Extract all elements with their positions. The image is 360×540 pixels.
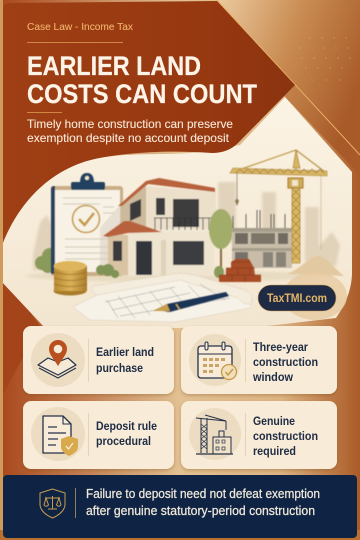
footer banner: after genuine statutory-period construction (86, 504, 315, 518)
icon: document with shield (43, 416, 78, 456)
illustration: clipboard (51, 173, 123, 276)
illustration: tower crane (230, 150, 327, 263)
card: deposit rule procedural: Deposit rule (96, 421, 157, 433)
icon: map pin (38, 340, 76, 378)
card: three-year construction window: window (252, 372, 293, 384)
card: genuine construction required (181, 401, 337, 469)
top-right corner panel (217, 0, 360, 175)
illustration: background skyline (33, 182, 340, 270)
illustration: ground shadow (25, 270, 315, 282)
illustration: tree (209, 209, 233, 278)
footer banner: Failure to deposit need not defeat exemption (86, 487, 320, 501)
illustration: blueprint roll (73, 273, 253, 322)
card: earlier land purchase: purchase (96, 363, 143, 375)
illustration: concrete building frame (232, 210, 292, 268)
hero illustration background (0, 97, 352, 328)
illustration: pen (153, 292, 229, 312)
subtitle: Timely home construction can preserve (27, 117, 233, 131)
rust header panel (3, 1, 295, 243)
card: earlier land purchase (23, 326, 174, 394)
card: deposit rule procedural: procedural (96, 436, 151, 448)
left edge strip (0, 0, 3, 540)
illustration: house (100, 178, 216, 276)
website badge (258, 272, 347, 320)
card: three-year construction window: construction (253, 357, 318, 369)
bottom strip (0, 530, 360, 540)
title: COSTS CAN COUNT (27, 79, 257, 109)
left rust corner (0, 270, 40, 400)
card: genuine construction required: required (253, 446, 296, 458)
icon: calendar (198, 342, 236, 380)
subtitle (27, 117, 233, 145)
subtitle: exemption despite no account deposit (27, 131, 230, 145)
card: three-year construction window: Three-year (253, 342, 308, 354)
title (27, 51, 257, 109)
title: EARLIER LAND (27, 51, 201, 81)
card: earlier land purchase: Earlier land (96, 347, 154, 359)
card: genuine construction required: Genuine (253, 416, 295, 428)
kicker: Case Law - Income Tax (27, 21, 134, 33)
icon: crane and building (196, 415, 233, 454)
illustration: bush (35, 248, 58, 273)
illustration: coin stack (54, 261, 87, 296)
illustration: small shrub (96, 264, 119, 278)
icon: shield with scales (40, 489, 65, 518)
illustration: sand pile (287, 256, 344, 276)
card: deposit rule procedural (23, 401, 174, 469)
card: three-year construction window (181, 326, 337, 394)
card: genuine construction required: construction (253, 431, 318, 443)
illustration: brick pile (219, 259, 261, 282)
website badge: TaxTMI.com (267, 291, 327, 305)
footer banner (3, 475, 357, 538)
